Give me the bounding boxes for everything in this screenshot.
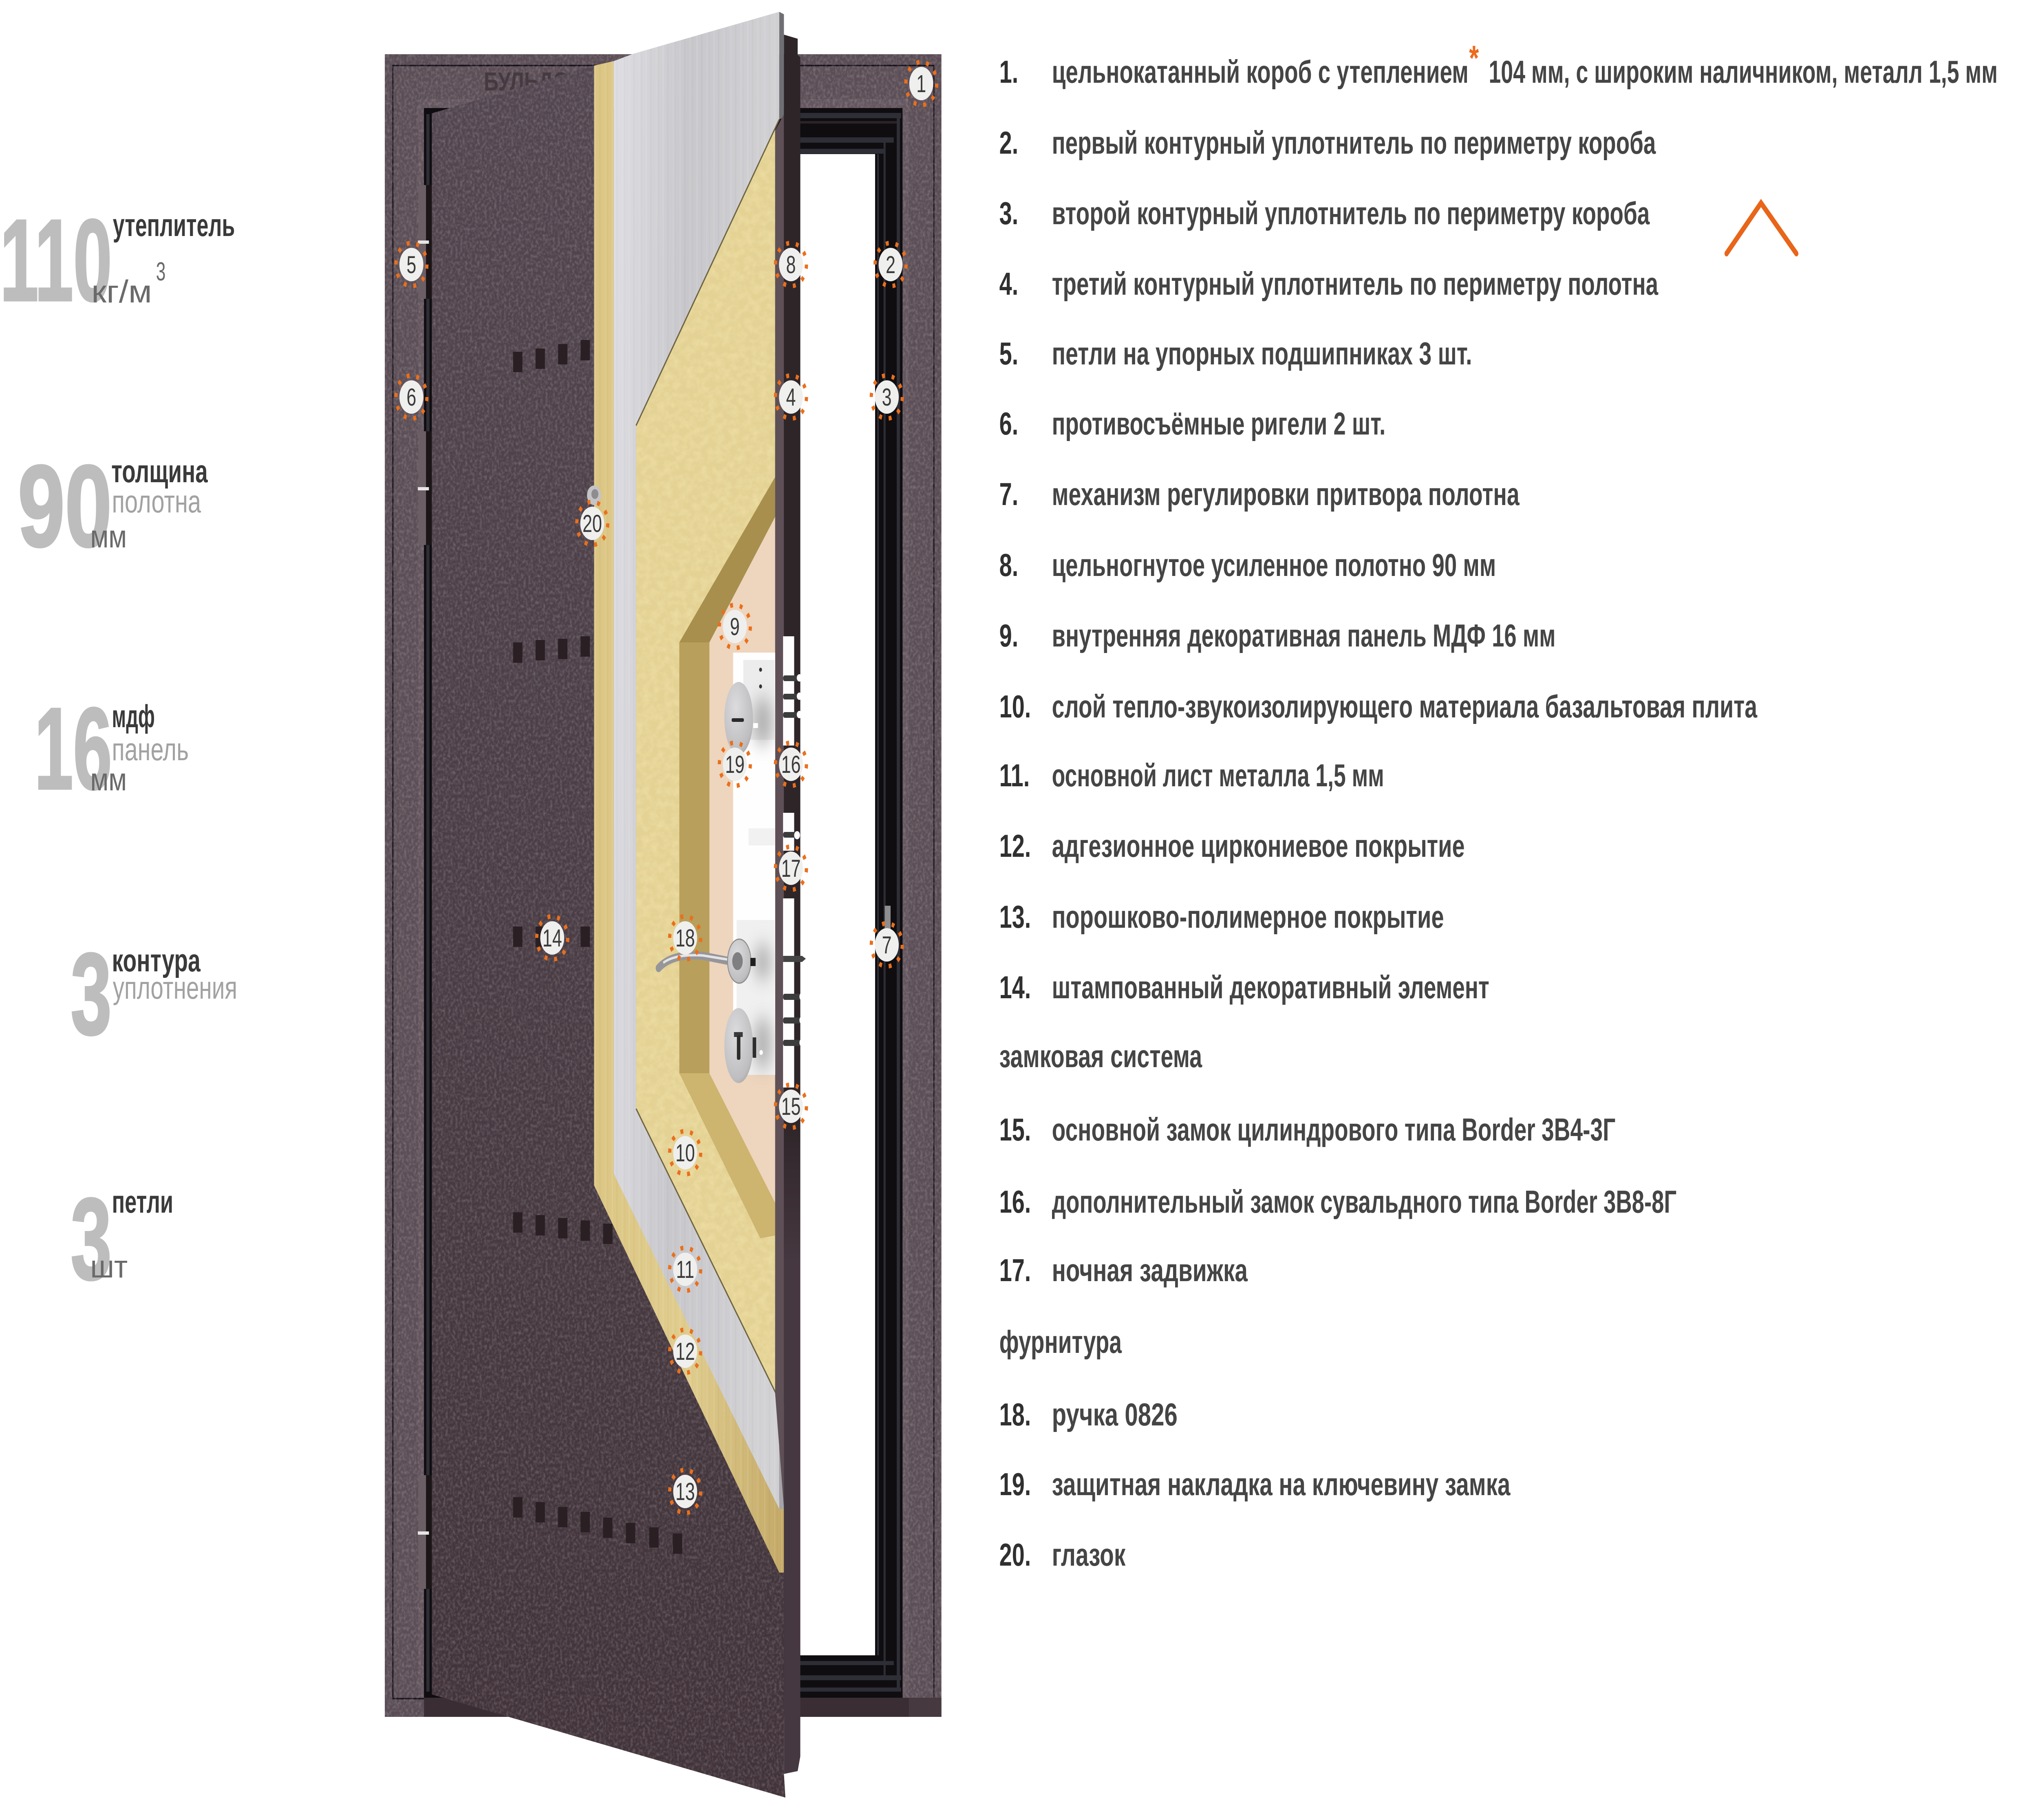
- marker 18: [670, 916, 701, 960]
- marker 6: [396, 375, 427, 419]
- stat: 110 insulation density: [0, 196, 235, 325]
- marker 17: 17: [781, 855, 801, 882]
- list item 17: 17.: [999, 1253, 1031, 1288]
- edge strip locks: [783, 636, 794, 746]
- list item 15: основной замок цилиндрового типа Border 3В4-3Г: [1052, 1112, 1615, 1147]
- marker 1: [906, 62, 937, 105]
- list item 20: 20.: [999, 1538, 1031, 1573]
- marker 13: [670, 1470, 701, 1513]
- list heading: lock system: замковая система: [999, 1039, 1202, 1074]
- marker 16: 16: [781, 751, 801, 779]
- marker 13: 13: [675, 1478, 695, 1506]
- insulation bevel upper: [679, 477, 775, 642]
- marker 20: 20: [582, 510, 602, 538]
- list item 19: защитная накладка на ключевину замка: [1052, 1467, 1511, 1502]
- stat: 110 insulation density: кг/м: [91, 274, 152, 309]
- marker 19: [719, 743, 750, 786]
- stat: 16 MDF panel: мм: [90, 762, 127, 797]
- list item 8: цельногнутое усиленное полотно 90 мм: [1052, 548, 1496, 583]
- list item 2: первый контурный уплотнитель по периметру короба: [1052, 126, 1656, 161]
- bolts: [783, 674, 806, 1047]
- adjustment pin: [885, 906, 891, 934]
- marker 16: [776, 743, 806, 786]
- cylinder cover: [724, 1008, 753, 1083]
- main steel sheet: [613, 12, 779, 1509]
- marker 15: [776, 1085, 806, 1128]
- marker 19: 19: [725, 751, 745, 779]
- marker 18: 18: [675, 925, 695, 952]
- list item 16: 16.: [999, 1185, 1031, 1220]
- list item 18: ручка 0826: [1052, 1397, 1178, 1432]
- list item 10: слой тепло-звукоизолирующего материала базальтовая плита: [1052, 689, 1758, 724]
- marker 8: [776, 243, 806, 286]
- list item 1: 1.: [999, 55, 1018, 90]
- list item 19: 19.: [999, 1467, 1031, 1502]
- lock white plate: [733, 653, 775, 1075]
- list item 2: 2.: [999, 126, 1018, 161]
- door frame: [385, 54, 942, 1717]
- stat: 16 MDF panel: мдф: [112, 699, 155, 734]
- outer powder-coated leaf: [432, 66, 785, 1798]
- door edge: [775, 114, 784, 1508]
- marker 10: [670, 1131, 701, 1174]
- list item 20: [999, 1538, 1125, 1573]
- marker 7: 7: [882, 932, 892, 959]
- panel: key specifications: [0, 196, 237, 1304]
- marker 3: 3: [882, 384, 892, 411]
- marker 9: [719, 605, 750, 648]
- MDF panel: [710, 517, 775, 1203]
- marker 11: 11: [676, 1256, 694, 1284]
- list item 18: 18.: [999, 1397, 1031, 1432]
- brand emboss: БУЛЬДОГ: [484, 67, 580, 96]
- stat: 110 insulation density: 3: [156, 257, 165, 286]
- door leaf cutaway: [432, 12, 800, 1798]
- list item 20: глазок: [1052, 1538, 1125, 1573]
- list item 6: 6.: [999, 406, 1018, 441]
- stat: 3 sealing contours: 3: [71, 929, 112, 1059]
- peephole: [587, 485, 601, 505]
- marker 4: 4: [786, 384, 796, 411]
- marker 5: [396, 243, 427, 286]
- list item 9: внутренняя декоративная панель МДФ 16 мм: [1052, 618, 1555, 653]
- stat: 110 insulation density: 110: [0, 196, 112, 325]
- list item 11: 11.: [999, 758, 1030, 793]
- stat: 90 leaf thickness: толщина: [111, 454, 208, 489]
- lower lock plate: [737, 920, 774, 1075]
- list item 1: [999, 38, 1998, 90]
- list item 1: *: [1469, 38, 1479, 77]
- list item 7: 7.: [999, 477, 1018, 512]
- list item 12: адгезионное циркониевое покрытие: [1052, 829, 1465, 864]
- icon: collapse chevron: [1727, 203, 1796, 254]
- numbered markers: [396, 62, 937, 1513]
- handle: [659, 955, 738, 968]
- stat: 3 sealing contours: [71, 929, 237, 1059]
- stat: 3 sealing contours: уплотнения: [113, 971, 237, 1006]
- marker 12: 12: [675, 1338, 695, 1366]
- list heading: hardware: фурнитура: [999, 1325, 1122, 1360]
- marker 14: 14: [543, 925, 562, 952]
- stat: 90 leaf thickness: мм: [90, 519, 127, 554]
- opening through the frame: [800, 154, 875, 1655]
- stat: 3 sealing contours: контура: [112, 943, 201, 978]
- stat: 3 hinges: шт: [90, 1249, 128, 1284]
- stat: 90 leaf thickness: [18, 441, 208, 571]
- list item 10: 10.: [999, 689, 1031, 724]
- stat: 90 leaf thickness: 90: [18, 441, 112, 571]
- list item 14: штампованный декоративный элемент: [1052, 970, 1489, 1005]
- list item 9: 9.: [999, 618, 1018, 653]
- marker 1: 1: [916, 71, 926, 98]
- upper lock plate: [743, 660, 774, 740]
- marker 12: [670, 1330, 701, 1373]
- list item 7: механизм регулировки притвора полотна: [1052, 477, 1520, 512]
- list item 3: 3.: [999, 196, 1018, 231]
- stat: 16 MDF panel: 16: [35, 684, 112, 814]
- marker 7: [871, 923, 902, 966]
- stat: 16 MDF panel: панель: [112, 732, 189, 767]
- stat: 3 hinges: петли: [112, 1185, 173, 1220]
- insulation bevel lower: [679, 1073, 775, 1238]
- marker 4: [776, 375, 806, 419]
- numbered component list: [999, 38, 1998, 1573]
- list item 4: 4.: [999, 267, 1018, 302]
- list item 13: порошково-полимерное покрытие: [1052, 900, 1444, 935]
- marker 9: 9: [730, 613, 740, 641]
- list item 4: третий контурный уплотнитель по периметру полотна: [1052, 267, 1659, 302]
- list item 3: второй контурный уплотнитель по периметру короба: [1052, 196, 1650, 231]
- marker 5: 5: [406, 251, 416, 279]
- marker 15: 15: [781, 1093, 801, 1121]
- stamped decorative elements: [513, 340, 682, 1554]
- list item 11: основной лист металла 1,5 мм: [1052, 758, 1384, 793]
- list item 16: дополнительный замок сувальдного типа Border 3В8-8Г: [1052, 1185, 1676, 1220]
- list item 5: 5.: [999, 336, 1018, 371]
- marker 2: [875, 243, 906, 286]
- keyhole cover: [724, 682, 753, 754]
- lock system: [659, 636, 806, 1088]
- stat: 3 hinges: [71, 1174, 173, 1304]
- list item 1: 104 мм, с широким наличником, металл 1,5 мм: [1489, 55, 1998, 90]
- hinges: [418, 185, 433, 1589]
- list item 1: цельнокатанный короб с утеплением: [1052, 55, 1469, 90]
- list item 15: 15.: [999, 1112, 1031, 1147]
- list item 14: 14.: [999, 970, 1031, 1005]
- marker 2: 2: [886, 251, 895, 279]
- marker 8: 8: [786, 251, 796, 279]
- marker 3: [871, 375, 902, 419]
- marker 17: [776, 847, 806, 890]
- marker 6: 6: [406, 384, 416, 411]
- list item 5: петли на упорных подшипниках 3 шт.: [1052, 336, 1472, 371]
- stat: 3 hinges: 3: [71, 1174, 112, 1304]
- list item 12: 12.: [999, 829, 1031, 864]
- stat: 16 MDF panel: [35, 684, 189, 814]
- list item 17: ночная задвижка: [1052, 1253, 1248, 1288]
- marker 20: [577, 502, 608, 545]
- list item 13: 13.: [999, 900, 1031, 935]
- list item 8: 8.: [999, 548, 1018, 583]
- marker 10: 10: [675, 1140, 695, 1167]
- marker 14: [537, 916, 568, 960]
- list item 18: [999, 1397, 1178, 1432]
- list item 6: противосъёмные ригели 2 шт.: [1052, 406, 1385, 441]
- insulation bevel left: [679, 642, 710, 1073]
- zirconium adhesion layer: [594, 61, 784, 1573]
- stat: 110 insulation density: утеплитель: [113, 208, 235, 243]
- marker 11: [670, 1248, 701, 1291]
- insulation layer: [636, 128, 775, 1396]
- stat: 90 leaf thickness: полотна: [112, 484, 201, 519]
